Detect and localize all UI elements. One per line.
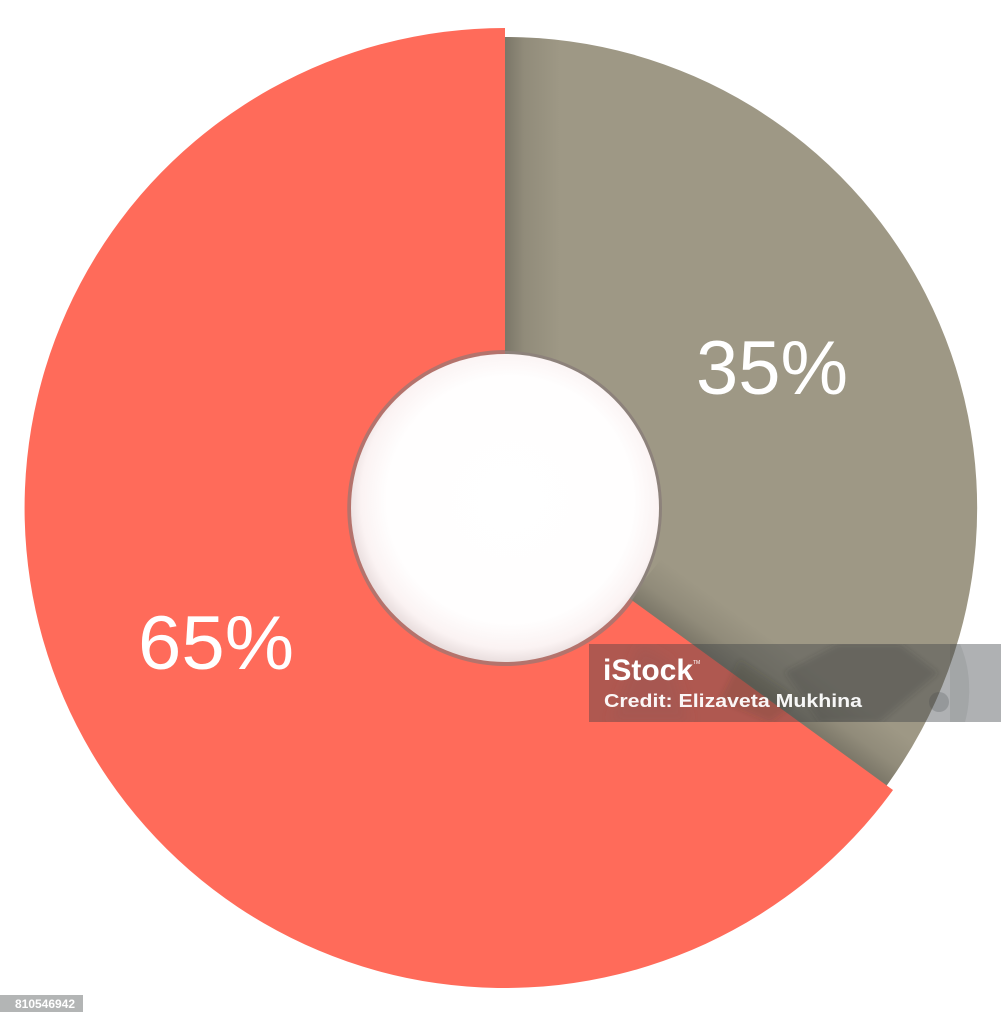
label: 65%: 65%: [138, 601, 294, 686]
watermark trademark: TM: [693, 660, 700, 666]
center hole: [347, 350, 662, 666]
segment: 35% grey: [505, 30, 977, 800]
image id tag: 810546942: [15, 999, 75, 1011]
image id tag: [0, 995, 83, 1012]
watermark credit: Credit: Elizaveta Mukhina: [604, 690, 863, 711]
label: 35%: 35%: [696, 326, 848, 411]
watermark band: [589, 644, 1001, 722]
watermark logo: iStock: [603, 654, 693, 687]
